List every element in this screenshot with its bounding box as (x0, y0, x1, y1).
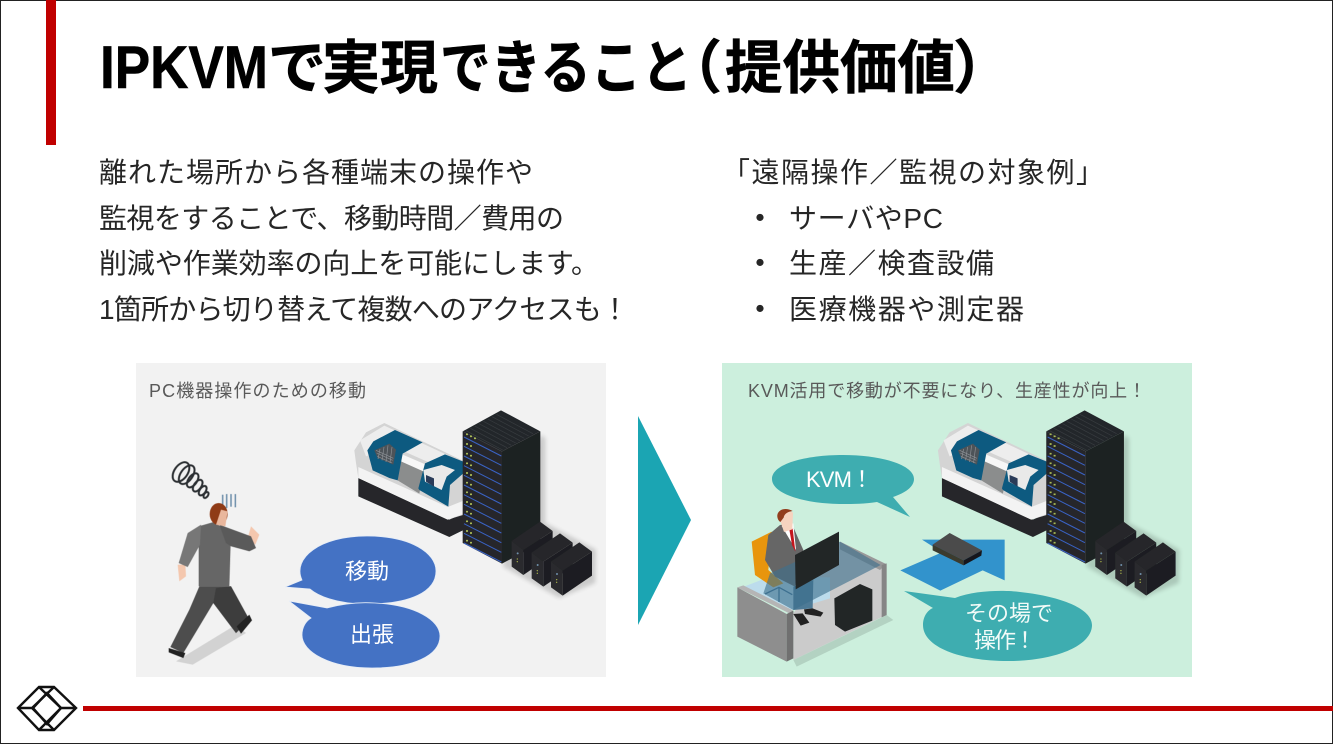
text block: description: 削減や作業効率の向上を可能にします。 (99, 248, 599, 279)
text block: description: 離れた場所から各種端末の操作や (99, 157, 533, 188)
text block: description (99, 157, 629, 325)
footer rule (83, 706, 1333, 711)
text block: remote operation examples: サーバやPC (789, 203, 943, 234)
illustration: machine, server rack and towers (938, 410, 1180, 598)
panel: before, travel to operate PC equipment (136, 363, 606, 677)
icon: KVM switch on blue arrow (900, 533, 1005, 591)
speech bubble: KVM (772, 455, 914, 517)
panel: after, no travel with KVM (722, 363, 1192, 677)
speech bubble: move (285, 536, 436, 604)
title: ） (953, 36, 1011, 101)
speech bubble: move: 移動 (345, 559, 389, 584)
text block: remote operation examples: 「遠隔操作／監視の対象例」 (722, 157, 1104, 188)
panel heading: after: KVM活用で移動が不要になり、生産性が向上！ (748, 381, 1146, 401)
speech bubble: business trip: 出張 (350, 622, 394, 647)
text block: remote operation examples: 生産／検査設備 (789, 248, 994, 279)
title: できること (440, 36, 692, 101)
arrow: before to after (638, 416, 691, 625)
speech bubble: operate on the spot (904, 591, 1092, 661)
title: で (268, 36, 326, 101)
text block: description: 1箇所から切り替えて複数へのアクセスも！ (99, 294, 629, 325)
title accent bar (46, 0, 56, 145)
speech bubble: operate on the spot: 操作！ (974, 628, 1036, 653)
title: IPKVM (100, 34, 268, 101)
title: （ (664, 36, 722, 101)
title: 実現 (322, 36, 438, 101)
text block: remote operation examples: 医療機器や測定器 (789, 294, 1024, 325)
illustration: worker at desk (737, 509, 893, 667)
speech bubble: KVM: KVM！ (806, 467, 873, 492)
text block: remote operation examples: ・ (746, 294, 774, 325)
title: 提供価値 (725, 36, 955, 101)
speech bubble: business trip (289, 601, 440, 668)
panel heading: before: PC機器操作のための移動 (149, 381, 366, 401)
footer logo (18, 687, 76, 730)
speech bubble: operate on the spot: その場で (965, 601, 1053, 626)
text block: remote operation examples (722, 157, 1104, 325)
illustration: walking worker (169, 459, 259, 665)
text block: remote operation examples: ・ (746, 203, 774, 234)
text block: remote operation examples: ・ (746, 248, 774, 279)
text block: description: 監視をすることで、移動時間／費用の (99, 203, 564, 234)
illustration: machine, server rack and towers (354, 410, 596, 598)
